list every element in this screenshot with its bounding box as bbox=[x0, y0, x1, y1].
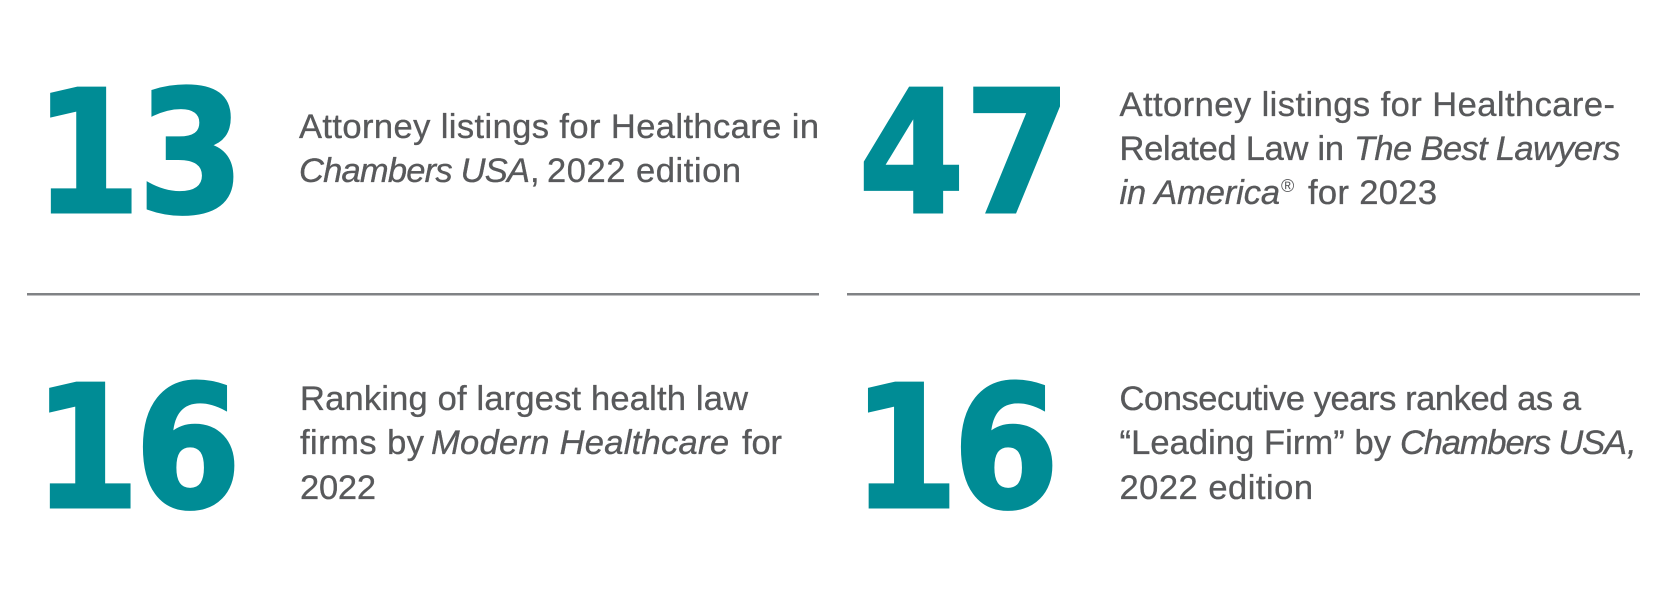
text: Best Lawyers description bbox=[1120, 86, 1620, 212]
number: 16: 1 bbox=[852, 350, 959, 548]
text: Modern Healthcare description: firms by bbox=[300, 424, 425, 462]
text: Best Lawyers description: ® bbox=[1281, 176, 1294, 196]
text: Leading Firm description: Chambers USA bbox=[1400, 424, 1627, 462]
text: Modern Healthcare description bbox=[300, 380, 782, 507]
number: 13: 3 bbox=[138, 55, 244, 253]
number: 16: 6 bbox=[135, 350, 241, 548]
text: Best Lawyers description: The Best Lawyers bbox=[1354, 130, 1620, 168]
text: Chambers description bbox=[299, 108, 819, 190]
panel: Chambers Healthcare listings bbox=[34, 55, 819, 253]
number: 16: 1 bbox=[33, 350, 140, 548]
text: Chambers description: Attorney listings for Healthcare in bbox=[299, 108, 819, 146]
text: Chambers description: Chambers USA bbox=[299, 152, 530, 190]
divider: left rule bbox=[27, 293, 819, 296]
text: Leading Firm description: 2022 edition bbox=[1120, 469, 1313, 507]
panel: Modern Healthcare ranking bbox=[33, 350, 782, 548]
text: Leading Firm description: “Leading Firm” by bbox=[1120, 424, 1392, 462]
text: Best Lawyers description: in America bbox=[1120, 174, 1280, 212]
text: Leading Firm description: Consecutive years ranked as a bbox=[1120, 380, 1582, 418]
text: Modern Healthcare description: Ranking of largest health law bbox=[300, 380, 748, 418]
text: Modern Healthcare description: for bbox=[742, 424, 782, 462]
number: 16 bbox=[852, 350, 1059, 548]
text: Best Lawyers description: for 2023 bbox=[1308, 174, 1437, 212]
panel: Best Lawyers listings bbox=[858, 55, 1620, 253]
text: Modern Healthcare description: 2022 bbox=[300, 469, 376, 507]
text: Best Lawyers description: Related Law in bbox=[1120, 130, 1344, 168]
text: Chambers description: , bbox=[530, 152, 540, 190]
text: Leading Firm description: , bbox=[1627, 424, 1637, 462]
number: 13 bbox=[34, 55, 244, 253]
number: 16 bbox=[33, 350, 241, 548]
number: 16: 6 bbox=[953, 350, 1059, 548]
divider: right rule bbox=[847, 293, 1640, 296]
text: Modern Healthcare description: Modern Healthcare bbox=[431, 424, 729, 462]
number: 47: 7 bbox=[964, 55, 1071, 253]
panel: Leading Firm years bbox=[852, 350, 1637, 548]
text: Leading Firm description bbox=[1120, 380, 1637, 507]
text: Best Lawyers description: Attorney listings for Healthcare- bbox=[1120, 86, 1615, 124]
number: 47: 4 bbox=[858, 55, 965, 253]
number: 13: 1 bbox=[34, 55, 141, 253]
number: 47 bbox=[858, 55, 1071, 253]
text: Chambers description: 2022 edition bbox=[547, 152, 741, 190]
